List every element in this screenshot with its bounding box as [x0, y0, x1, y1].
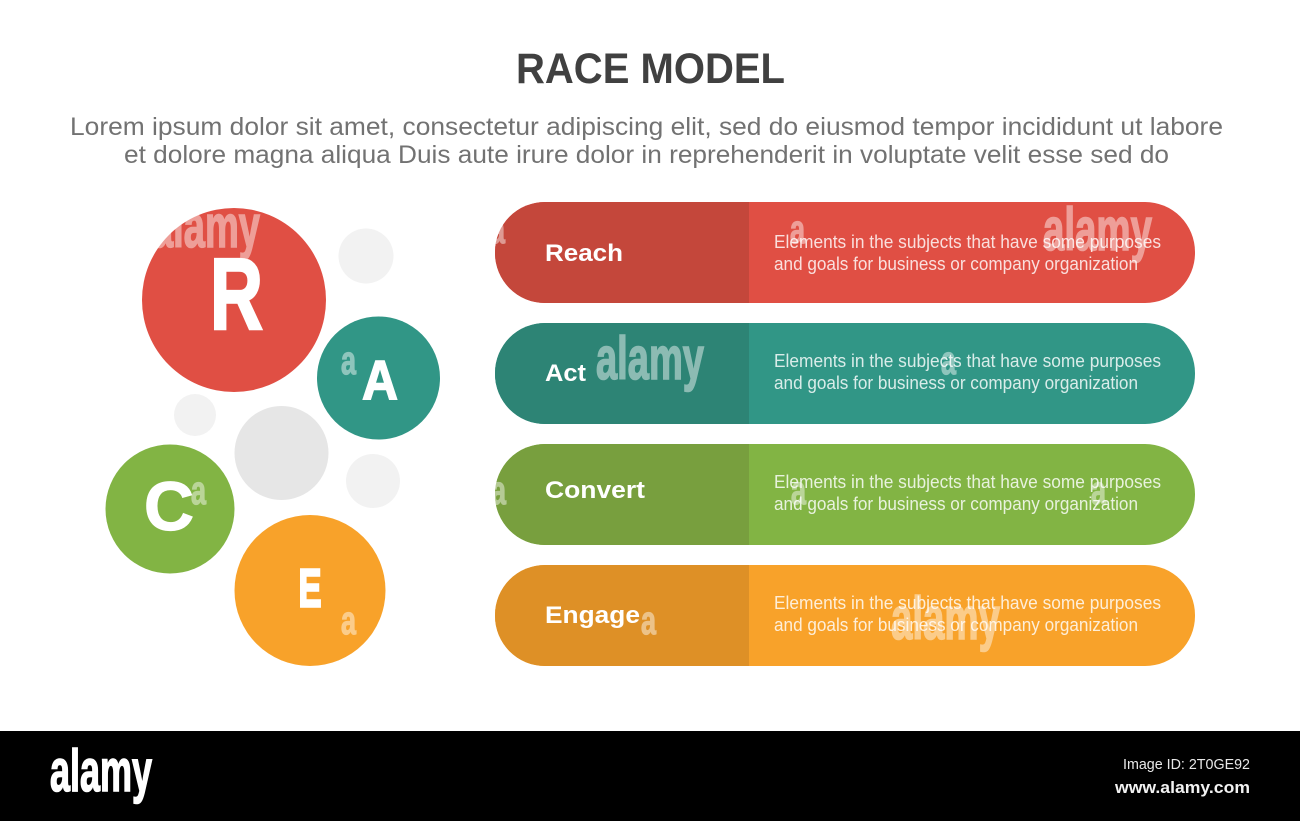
footer logo: alamy	[50, 738, 152, 804]
bubble: E	[234, 515, 386, 666]
watermarks: a	[791, 469, 807, 513]
label: Engage: Engage	[545, 602, 640, 629]
decorative grey bubbles	[174, 228, 400, 508]
row: Convert	[495, 444, 1195, 545]
description: Convert: and goals for business or company organization	[774, 494, 1138, 514]
watermarks: a	[1091, 469, 1107, 513]
description: Engage: Elements in the subjects that have some purposes	[774, 593, 1161, 613]
bubble: C	[106, 444, 234, 574]
bubble: R	[142, 208, 326, 392]
description: Convert	[774, 472, 1161, 514]
image id: Image ID: 2T0GE92	[1123, 756, 1250, 773]
description: Act: Elements in the subjects that have some purposes	[774, 351, 1161, 371]
description: Act	[774, 351, 1161, 393]
subtitle text: et dolore magna aliqua Duis aute irure dolor in reprehenderit in voluptate velit esse sed do	[124, 141, 1169, 169]
label: Act: Act	[545, 360, 586, 387]
label: Convert: Convert	[545, 477, 645, 504]
description: Engage	[774, 593, 1161, 635]
subtitle text: Lorem ipsum dolor sit amet, consectetur adipiscing elit, sed do eiusmod tempor incididunt ut labore	[70, 113, 1223, 141]
subtitle text	[70, 113, 1223, 169]
watermarks: a	[191, 469, 207, 513]
row: Engage	[495, 565, 1195, 666]
website: www.alamy.com	[1114, 778, 1250, 797]
description: Reach: and goals for business or company organization	[774, 254, 1138, 274]
watermarks: alamy	[596, 325, 704, 392]
watermarks: a	[491, 469, 507, 513]
watermarks: a	[490, 208, 506, 252]
watermarks: a	[941, 339, 957, 383]
description: Reach: Elements in the subjects that have some purposes	[774, 232, 1161, 252]
label: Reach: Reach	[545, 240, 623, 267]
description: Engage: and goals for business or company organization	[774, 615, 1138, 635]
watermarks: a	[341, 339, 357, 383]
bubble: A	[317, 316, 440, 440]
watermarks: alamy	[891, 585, 1000, 652]
watermarks: a	[641, 599, 657, 643]
bubble: A: A	[362, 348, 398, 412]
title: RACE MODEL	[516, 45, 785, 93]
footer bar	[0, 731, 1300, 821]
watermarks: alamy	[1043, 196, 1152, 263]
row: Act	[495, 323, 1195, 424]
bubble: E: E	[298, 558, 322, 618]
bubble: C: C	[144, 468, 194, 545]
watermarks: a	[790, 208, 806, 252]
watermarks: alamy	[152, 193, 260, 260]
bubble cluster	[106, 208, 440, 666]
row: Reach	[495, 202, 1195, 303]
watermarks	[152, 193, 1152, 652]
bubble: R: R	[210, 239, 263, 351]
description: Act: and goals for business or company organization	[774, 373, 1138, 393]
description: Reach	[774, 232, 1161, 274]
description: Convert: Elements in the subjects that have some purposes	[774, 472, 1161, 492]
watermarks: a	[341, 599, 357, 643]
